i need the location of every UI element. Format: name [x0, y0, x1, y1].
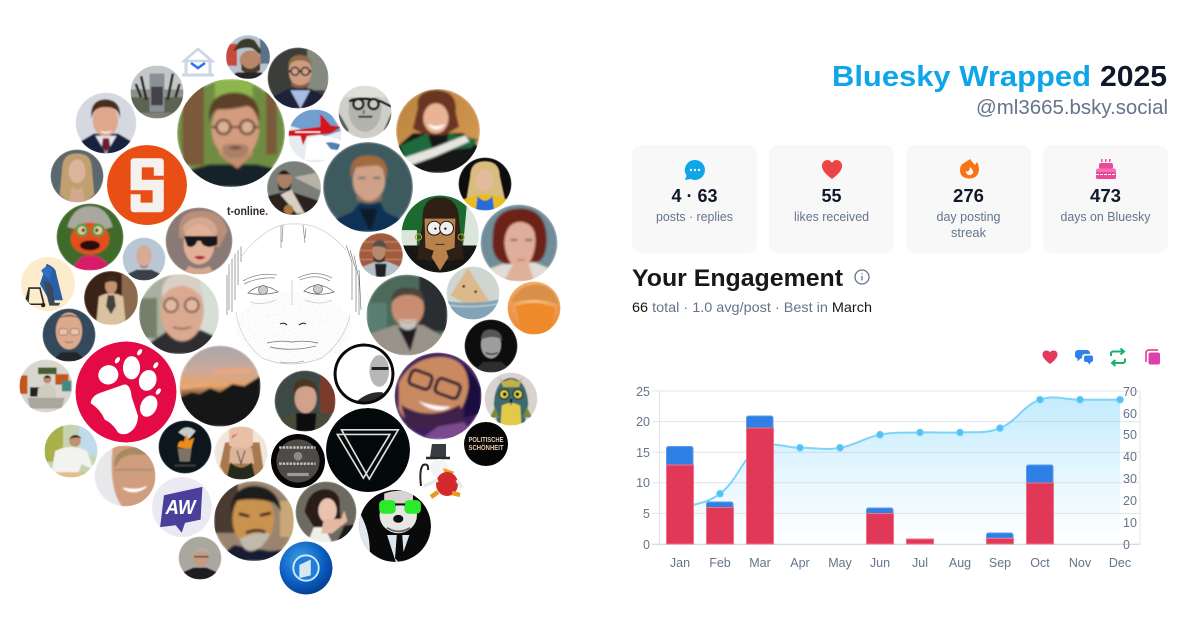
- avatar: man at desk thinking: [44, 424, 98, 478]
- avatar bubble cluster: [20, 35, 561, 594]
- avatar: man in gray suit jacket: [366, 274, 448, 356]
- avatar: woman with large sunglasses: [166, 208, 232, 274]
- heading: Your Engagement: Your Engagement: [632, 265, 843, 292]
- grid lines: [652, 391, 1140, 544]
- month labels: May: [828, 556, 853, 570]
- right axis labels: 20: [1123, 494, 1137, 508]
- month labels: Dec: [1109, 556, 1131, 570]
- avatar: paw logo: [76, 342, 176, 442]
- avatar: berlin wall segment: [130, 66, 184, 118]
- icon: birthday cake: [1096, 159, 1116, 179]
- icon: heart: [822, 160, 842, 179]
- month labels: Feb: [709, 556, 731, 570]
- month labels: Mar: [749, 556, 771, 570]
- month labels: Oct: [1030, 556, 1050, 570]
- cumulative line: [680, 397, 1120, 509]
- icon: info: [855, 270, 869, 284]
- avatar: Politische Schönheit logo: [464, 422, 508, 466]
- avatar: painted owl: [484, 372, 538, 426]
- right axis labels: 40: [1123, 450, 1137, 464]
- avatar: blonde woman: [50, 150, 104, 202]
- month labels: Apr: [790, 556, 810, 570]
- stat card: posts and replies: [632, 145, 757, 253]
- avatar: orange S logo: [107, 145, 187, 225]
- avatar: denim pocket close up: [446, 266, 500, 320]
- avatar: black and white man: [464, 320, 518, 372]
- icon: legend heart: [1042, 350, 1058, 364]
- right axis labels: 60: [1123, 407, 1137, 421]
- month labels: Sep: [989, 556, 1011, 570]
- avatar: pencil sketch portrait: [222, 223, 366, 368]
- avatar: bald man in small portrait: [122, 238, 166, 280]
- month labels: Jun: [870, 556, 890, 570]
- left axis labels: 10: [636, 476, 650, 490]
- stat card: likes received: 55: [822, 185, 842, 206]
- avatar: black and white man with glasses: [338, 86, 392, 138]
- icon: legend quote copies: [1146, 350, 1160, 364]
- avatar: sunset over trees: [180, 346, 260, 426]
- avatar: smiling man in suit: [76, 92, 136, 154]
- avatar: red haired woman: [480, 204, 558, 282]
- stat card: likes received: [769, 145, 894, 253]
- avatar: Forever Oakland badge: [271, 434, 325, 488]
- avatar: Politische Schönheit logo: SCHÖNHEIT: [468, 443, 504, 452]
- handle: @ml3665.bsky.social: [976, 97, 1168, 119]
- avatar: double triangle logo: [326, 408, 410, 492]
- avatar: man with glasses in blazer: [268, 48, 328, 108]
- avatar: smiling man with bold glasses: [394, 352, 482, 440]
- avatar: white circle with black ring and portrait: [334, 344, 394, 404]
- avatar: man in hat: [226, 35, 270, 79]
- month labels: [670, 556, 1131, 570]
- title: 2025: [1100, 61, 1167, 93]
- avatar: man with teal background: [323, 142, 413, 232]
- avatar: person seated in colorful office: [20, 360, 73, 412]
- stat card: day posting streak: 276: [953, 185, 984, 206]
- right axis labels: [1123, 385, 1137, 552]
- left axis labels: 0: [643, 538, 650, 552]
- cumulative area: [680, 397, 1120, 544]
- avatar: older man with glasses: [139, 274, 219, 354]
- avatar: woman resting chin on hand: [296, 482, 356, 542]
- avatar: blonde woman in yellow: [458, 158, 512, 210]
- chart legend icons: [1042, 348, 1160, 366]
- avatar: Politische Schönheit logo: POLITISCHE: [468, 435, 504, 444]
- stat card: posts and replies: posts · replies: [656, 210, 733, 224]
- right axis labels: 10: [1123, 516, 1137, 530]
- stat card: likes received: likes received: [794, 210, 869, 224]
- avatar: cartoon woman with big eyes: [402, 196, 478, 272]
- left axis labels: 5: [643, 507, 650, 521]
- avatar: man in trench coat: [84, 271, 138, 325]
- left axis labels: 20: [636, 415, 650, 429]
- avatar: dog in suit with green sunglasses: [359, 490, 431, 562]
- avatar: batman with walker: [21, 257, 75, 311]
- avatar: woman on wooden floor: [396, 89, 480, 173]
- avatar: tough man with beard: [214, 481, 294, 561]
- avatar: woman with necklace: [214, 426, 268, 480]
- stat card: days on Bluesky: [1043, 145, 1168, 253]
- avatar: fire in glass: [158, 420, 212, 474]
- avatar: muppet with green glasses: [56, 204, 124, 270]
- avatar: small man with glasses: [178, 536, 222, 580]
- avatar: smiling man with rimless glasses: [94, 446, 156, 506]
- month labels: Jul: [912, 556, 928, 570]
- stat card: posts and replies: 4 · 63: [672, 185, 718, 206]
- t-online logo text: t-online.: [227, 206, 268, 218]
- left axis labels: 15: [636, 446, 650, 460]
- avatar: AW speech bubble logo: AW: [165, 497, 197, 519]
- engagement summary: 66 total · 1.0 avg/post · Best in March: [632, 299, 872, 315]
- avatar: man with dark beard and scarf: [267, 161, 321, 215]
- month labels: Nov: [1069, 556, 1092, 570]
- stat card: days on Bluesky: days on Bluesky: [1060, 210, 1151, 224]
- engagement chart: [636, 385, 1140, 570]
- stat card: day posting streak: [906, 145, 1031, 253]
- icon: flame: [960, 159, 979, 178]
- avatar: man by brick wall: [359, 233, 403, 277]
- red bars: likes: [666, 428, 1054, 544]
- right axis labels: 70: [1123, 385, 1137, 399]
- right axis labels: 30: [1123, 472, 1137, 486]
- avatar: man in dark turtleneck: [274, 370, 336, 432]
- avatar: bald man with glasses on blue: [42, 308, 96, 362]
- stat card: day posting streak: streak: [951, 226, 987, 240]
- month labels: Aug: [949, 556, 971, 570]
- line points: [717, 396, 1123, 497]
- stat card: day posting streak: day posting: [936, 210, 1001, 224]
- month labels: Jan: [670, 556, 690, 570]
- blue bars: replies: [666, 416, 1053, 538]
- avatar: AW speech bubble logo: [152, 477, 212, 537]
- avatar: red airplane over clouds: [288, 110, 342, 162]
- right axis labels: 50: [1123, 428, 1137, 442]
- icon: legend repost arrows: [1111, 348, 1125, 366]
- stat card: days on Bluesky: 473: [1090, 185, 1121, 206]
- avatar: woman in orange tinted hat: [508, 282, 560, 334]
- sticker: Scrooge McDuck: [420, 444, 462, 497]
- avatar: tagesschau blue globe: [280, 542, 332, 594]
- left axis labels: [636, 385, 650, 552]
- avatar: man in forest with round glasses: [177, 79, 285, 187]
- title: Bluesky Wrapped: [832, 61, 1091, 93]
- right axis labels: 0: [1123, 538, 1130, 552]
- left axis labels: 25: [636, 385, 650, 399]
- icon: chat bubble: [685, 160, 705, 180]
- icon: mail building logo: [182, 49, 214, 75]
- icon: legend chat bubbles: [1075, 350, 1093, 364]
